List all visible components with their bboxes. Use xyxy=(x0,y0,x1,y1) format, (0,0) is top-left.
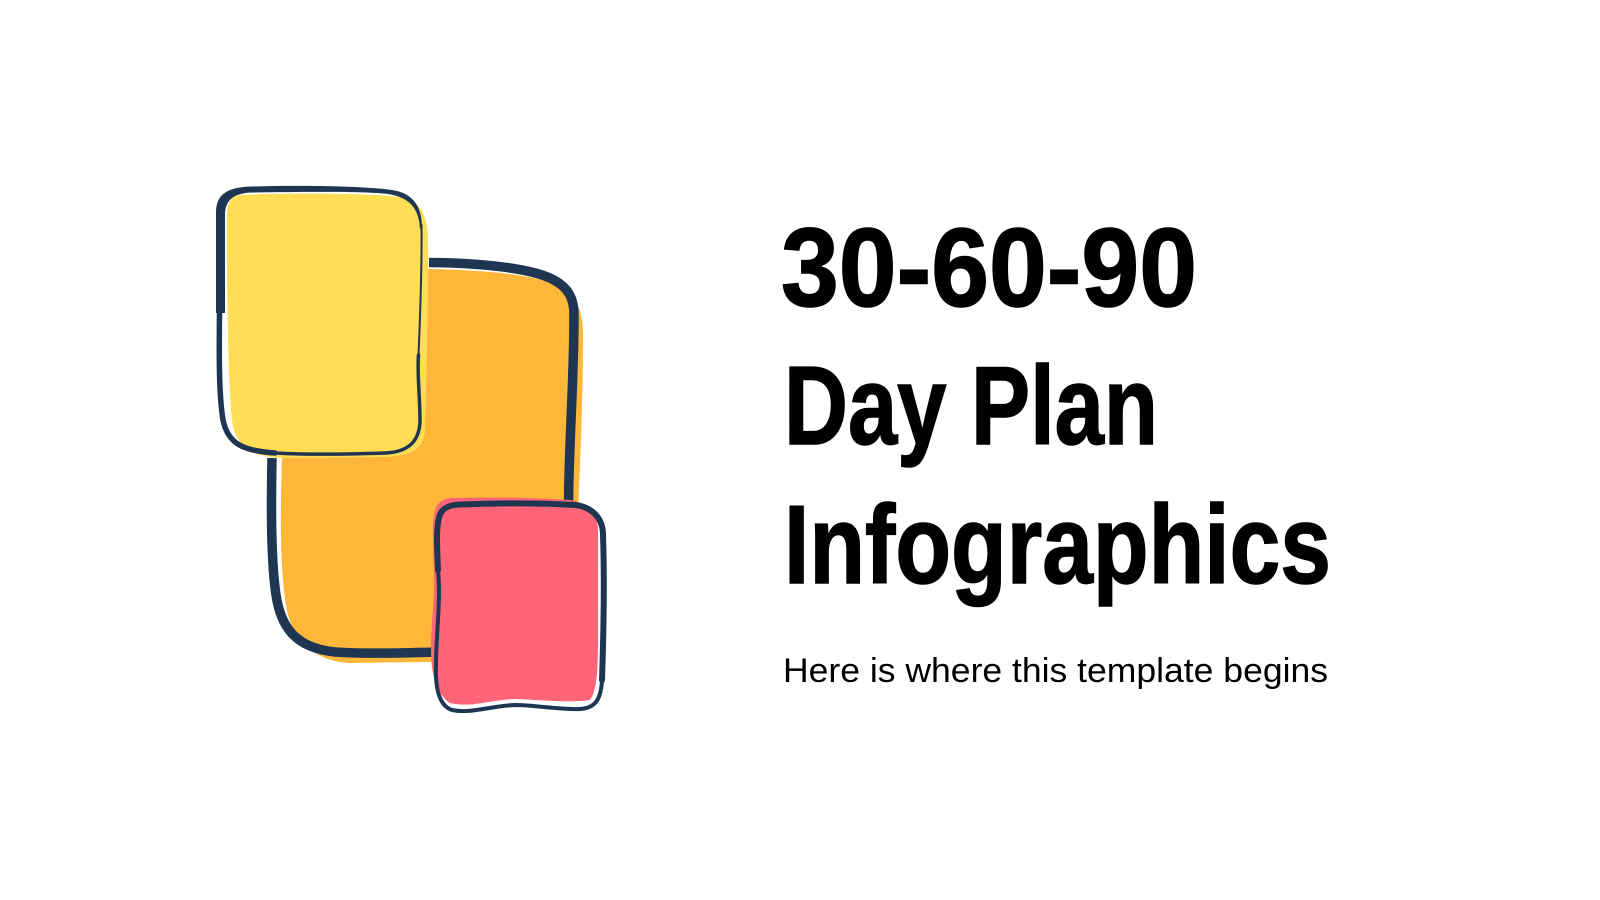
title: Infographics xyxy=(784,483,1331,607)
title: Day Plan xyxy=(784,344,1158,468)
note: yellow small xyxy=(216,186,428,458)
subtitle: Here is where this template begins xyxy=(783,652,1328,690)
note: red small xyxy=(431,498,604,711)
note: orange large xyxy=(271,262,583,663)
title xyxy=(781,206,1331,607)
panel: overlapping notes illustration xyxy=(216,186,604,711)
title: 30-60-90 xyxy=(781,206,1197,330)
